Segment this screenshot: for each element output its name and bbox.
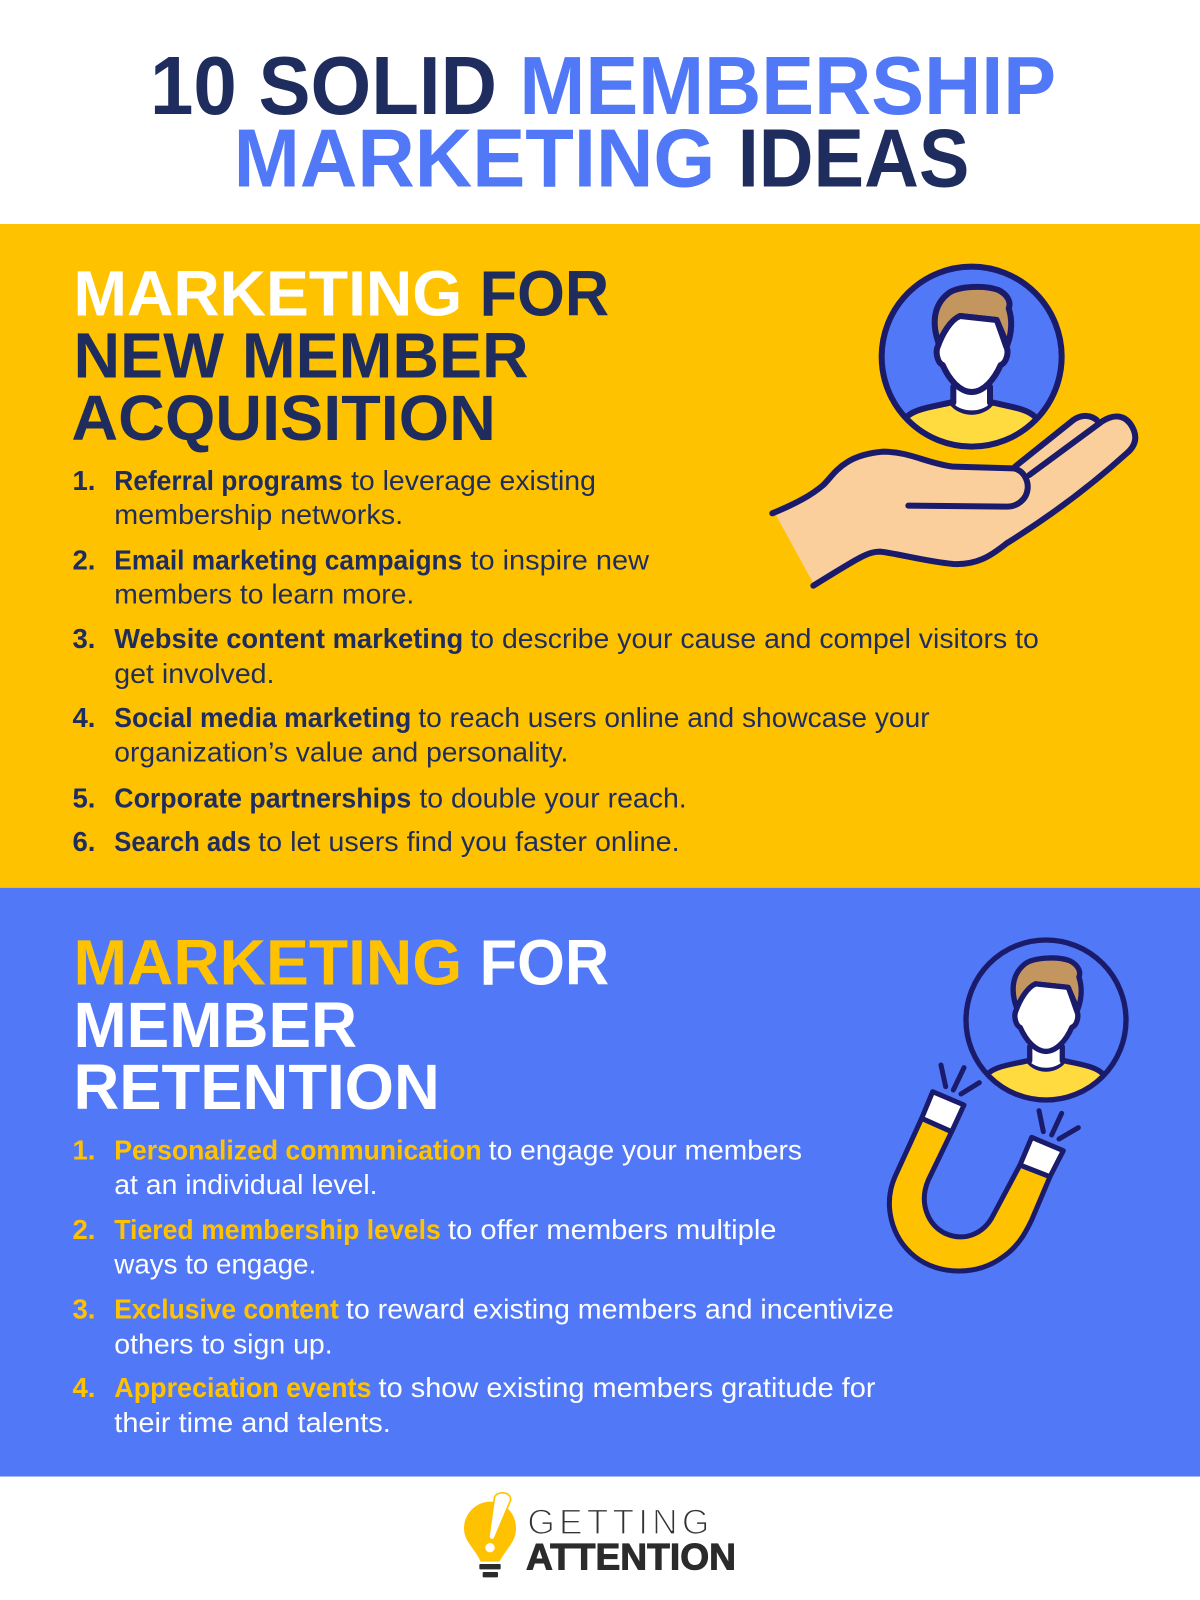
heading: marketing for member retention: MARKETING (73, 927, 462, 999)
numbered list: retention ideas: Personalized communication (114, 1134, 482, 1165)
heading: marketing for new member acquisition: NEW MEMBER (73, 320, 529, 392)
panel: new member acquisition (0, 224, 1200, 888)
panel: member retention (0, 888, 1200, 1477)
title: 10 SOLID (150, 39, 497, 132)
numbered list: retention ideas: their time and talents. (114, 1407, 391, 1438)
numbered list: retention ideas: 1. (72, 1134, 95, 1165)
numbered list: retention ideas: ways to engage. (113, 1249, 316, 1280)
numbered list: acquisition ideas: Corporate partnerships (114, 782, 411, 813)
icon: magnet attracting member (889, 940, 1126, 1271)
numbered list: acquisition ideas: to double your reach. (419, 782, 687, 813)
heading: marketing for member retention: MEMBER (73, 989, 357, 1061)
heading: marketing for member retention: RETENTION (73, 1051, 440, 1123)
wordmark: GETTING (527, 1503, 709, 1542)
numbered list: retention ideas (72, 1134, 894, 1438)
numbered list: retention ideas: 2. (72, 1214, 95, 1245)
title: MEMBERSHIP (519, 39, 1056, 132)
heading: marketing for new member acquisition (71, 257, 609, 454)
heading: marketing for member retention (73, 927, 609, 1123)
numbered list: retention ideas: others to sign up. (114, 1328, 333, 1359)
numbered list: retention ideas: 3. (72, 1294, 95, 1325)
wordmark (526, 1503, 736, 1577)
numbered list: acquisition ideas: get involved. (114, 658, 274, 689)
numbered list: acquisition ideas: Referral programs (114, 465, 343, 496)
numbered list: retention ideas: to offer members multiple (448, 1214, 777, 1245)
wordmark: ATTENTION (526, 1536, 736, 1577)
numbered list: acquisition ideas: organization’s value and personality. (114, 736, 568, 767)
member portrait (882, 267, 1062, 447)
heading: marketing for member retention: FOR (480, 927, 609, 999)
hand (772, 416, 1135, 586)
numbered list: retention ideas: to engage your members (489, 1134, 802, 1165)
numbered list: retention ideas: at an individual level. (114, 1169, 378, 1200)
numbered list: retention ideas: to show existing members gratitude for (379, 1372, 876, 1403)
icon: hand holding member portrait (772, 267, 1135, 586)
numbered list: acquisition ideas (72, 465, 1039, 857)
numbered list: retention ideas: Exclusive content (114, 1294, 339, 1325)
heading: marketing for new member acquisition: FOR (480, 257, 609, 329)
numbered list: acquisition ideas: Social media marketing (114, 702, 411, 733)
numbered list: acquisition ideas: membership networks. (114, 499, 403, 530)
numbered list: acquisition ideas: 6. (72, 826, 95, 857)
numbered list: acquisition ideas: 4. (72, 702, 95, 733)
member portrait (966, 940, 1126, 1100)
numbered list: acquisition ideas: to describe your cause and compel visitors to (470, 623, 1039, 654)
numbered list: acquisition ideas: Email marketing campaigns (114, 545, 462, 576)
numbered list: acquisition ideas: Search ads (114, 826, 251, 857)
numbered list: acquisition ideas: 3. (72, 623, 95, 654)
title: IDEAS (738, 112, 969, 205)
numbered list: acquisition ideas: members to learn more. (114, 578, 414, 609)
numbered list: retention ideas: 4. (72, 1372, 95, 1403)
magnet (889, 1065, 1078, 1271)
numbered list: acquisition ideas: Website content marketing (114, 623, 463, 654)
numbered list: acquisition ideas: to leverage existing (351, 465, 596, 496)
numbered list: retention ideas: Tiered membership levels (114, 1214, 441, 1245)
numbered list: acquisition ideas: to let users find you faster online. (258, 826, 680, 857)
title: MARKETING (234, 112, 715, 205)
numbered list: acquisition ideas: to inspire new (470, 545, 649, 576)
numbered list: acquisition ideas: 2. (72, 545, 95, 576)
logo: Getting Attention (464, 1493, 736, 1577)
numbered list: retention ideas: Appreciation events (114, 1372, 371, 1403)
heading: marketing for new member acquisition: ACQUISITION (71, 382, 496, 454)
icon: light bulb with exclamation mark (464, 1493, 516, 1577)
numbered list: retention ideas: to reward existing members and incentivize (346, 1294, 894, 1325)
heading: marketing for new member acquisition: MARKETING (73, 257, 462, 329)
numbered list: acquisition ideas: to reach users online and showcase your (418, 702, 930, 733)
title (150, 39, 1056, 205)
numbered list: acquisition ideas: 5. (72, 782, 95, 813)
numbered list: acquisition ideas: 1. (72, 465, 95, 496)
